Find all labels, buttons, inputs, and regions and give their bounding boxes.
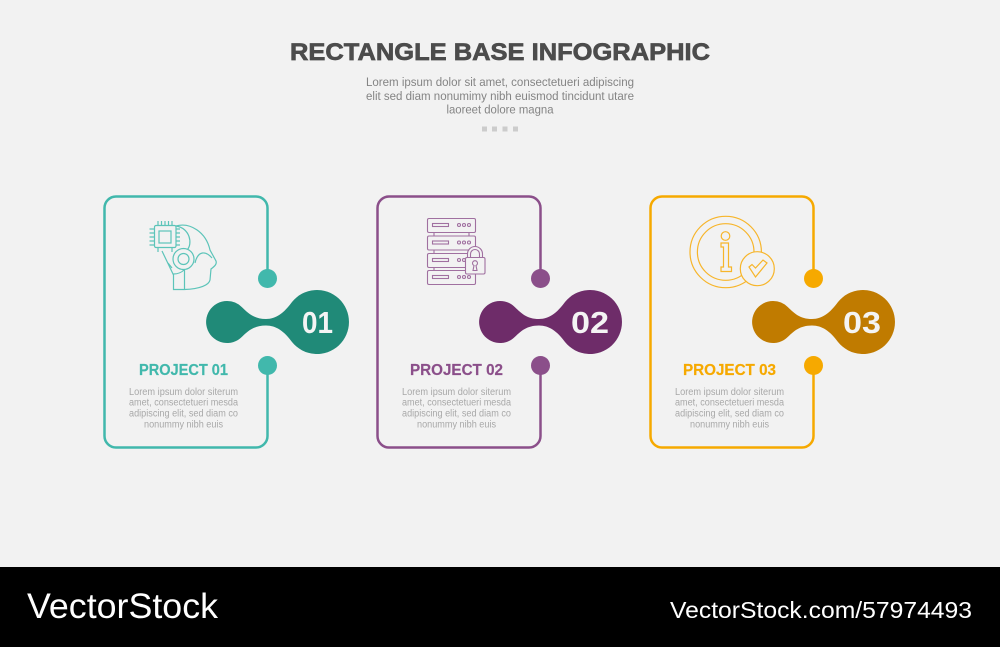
number blob 01	[206, 290, 349, 354]
body text 02	[402, 387, 512, 430]
connector dots 03	[804, 269, 823, 375]
footer url text: VectorStock.com/57974493	[670, 597, 972, 623]
card outline 03	[650, 196, 814, 448]
panel: project 02	[378, 196, 622, 448]
body text 01: amet, consectetueri mesda	[129, 398, 239, 408]
body text 02: Lorem ipsum dolor siterum	[402, 387, 511, 398]
separator squares	[482, 126, 518, 132]
card outline 02	[378, 196, 540, 448]
body text 01: adipiscing elit, sed diam co	[129, 408, 239, 420]
number blob 02	[479, 290, 622, 354]
body text 03: nonummy nibh euis	[690, 420, 769, 430]
icon: AI head with chip	[150, 221, 216, 290]
subtitle text block	[366, 75, 634, 116]
icon: server with lock	[428, 218, 485, 284]
label: project 01: PROJECT 01	[139, 362, 228, 379]
body text 03: adipiscing elit, sed diam co	[675, 408, 785, 420]
footer logo text: VectorStock	[27, 587, 219, 626]
body text 03: Lorem ipsum dolor siterum	[675, 387, 784, 398]
panel: project 01	[104, 196, 349, 448]
footer bar	[0, 567, 1000, 647]
body text 01: nonummy nibh euis	[144, 420, 223, 430]
body text 01: Lorem ipsum dolor siterum	[129, 387, 238, 398]
number 03: 03	[843, 305, 881, 340]
body text 02: adipiscing elit, sed diam co	[402, 408, 512, 420]
subtitle text block: laoreet dolore magna	[446, 102, 554, 116]
number 01: 01	[302, 305, 333, 340]
label: project 03: PROJECT 03	[683, 362, 776, 379]
number blob 03	[752, 290, 895, 354]
subtitle text block: Lorem ipsum dolor sit amet, consectetueri adipiscing	[366, 75, 634, 89]
title: RECTANGLE BASE INFOGRAPHIC	[290, 39, 710, 66]
body text 02: nonummy nibh euis	[417, 420, 496, 430]
number 02: 02	[571, 305, 609, 340]
connector dots 02	[531, 269, 550, 375]
card outline 01	[104, 196, 268, 448]
label: project 02: PROJECT 02	[410, 362, 503, 379]
connector dots 01	[258, 269, 277, 375]
subtitle text block: elit sed diam nonumimy nibh euismod tincidunt utare	[366, 89, 634, 103]
icon: info with check	[690, 216, 774, 288]
panel: project 03	[650, 196, 895, 448]
body text 01	[129, 387, 239, 430]
body text 03: amet, consectetueri mesda	[675, 398, 785, 408]
body text 03	[675, 387, 785, 430]
body text 02: amet, consectetueri mesda	[402, 398, 512, 408]
